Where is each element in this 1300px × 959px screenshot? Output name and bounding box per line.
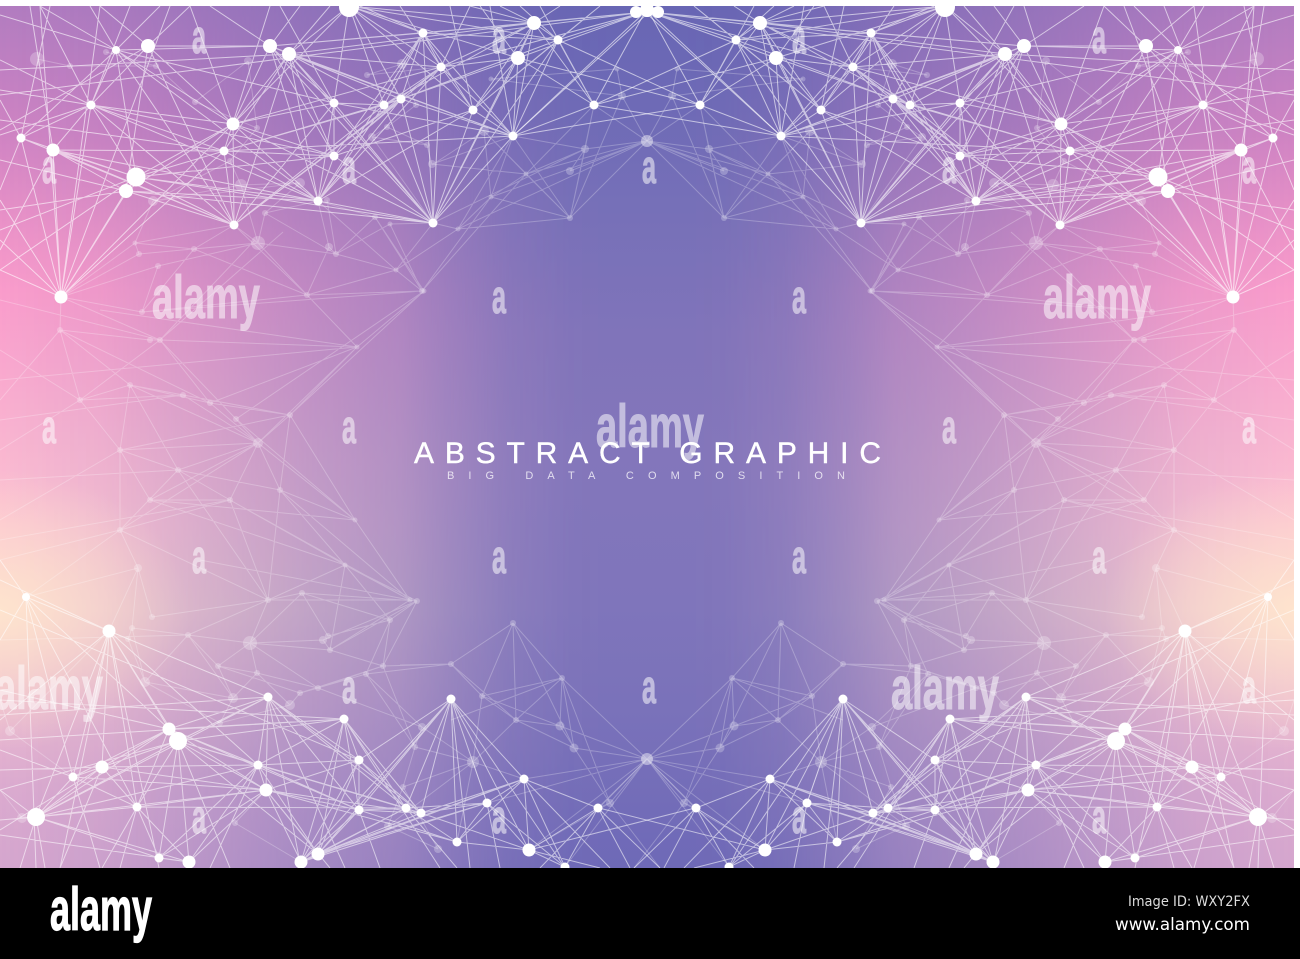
large watermark words: alamy	[891, 655, 999, 722]
small repeated watermark letters: a	[492, 790, 506, 843]
small repeated watermark letters: a	[42, 400, 56, 453]
subtitle: BIG DATA COMPOSITION	[447, 470, 845, 482]
small repeated watermark letters: a	[492, 530, 506, 583]
small repeated watermark letters: a	[1092, 10, 1106, 63]
small repeated watermark letters: a	[942, 400, 956, 453]
small repeated watermark letters: a	[942, 140, 956, 193]
large watermark words	[0, 264, 1151, 722]
small repeated watermark letters: a	[342, 140, 356, 193]
small repeated watermark letters: a	[1092, 530, 1106, 583]
small repeated watermark letters: a	[192, 10, 206, 63]
large watermark words: alamy	[1043, 264, 1151, 331]
large watermark words: alamy	[152, 264, 260, 331]
large watermark words: alamy	[596, 393, 704, 460]
small repeated watermark letters: a	[42, 140, 56, 193]
faint background lines	[0, 52, 700, 868]
website: www.alamy.com	[1115, 915, 1250, 935]
small repeated watermark letters: a	[342, 400, 356, 453]
small repeated watermark letters: a	[642, 660, 656, 713]
network: right half (mirror of left)	[513, 0, 1294, 872]
small repeated watermark letters: a	[492, 270, 506, 323]
footer bar	[0, 868, 1300, 959]
faint nodes	[5, 49, 653, 853]
network: left half	[0, 0, 781, 872]
small repeated watermark letters: a	[1242, 660, 1256, 713]
footer content	[50, 876, 1250, 944]
small repeated watermark letters: a	[642, 140, 656, 193]
bright nodes	[16, 0, 654, 872]
small repeated watermark letters: a	[1242, 140, 1256, 193]
small repeated watermark letters: a	[792, 530, 806, 583]
small repeated watermark letters: a	[1242, 400, 1256, 453]
small repeated watermark letters: a	[192, 530, 206, 583]
large watermark words: alamy	[0, 655, 103, 722]
small repeated watermark letters: a	[792, 790, 806, 843]
small repeated watermark letters: a	[192, 790, 206, 843]
small repeated watermark letters: a	[792, 10, 806, 63]
bottom bright lines	[0, 560, 695, 868]
title: ABSTRACT GRAPHIC	[414, 437, 881, 470]
small repeated watermark letters: a	[492, 10, 506, 63]
small repeated watermark letters: a	[1092, 790, 1106, 843]
alamy logo: alamy	[50, 876, 152, 943]
image id: Image ID: WXY2FX	[1128, 894, 1250, 910]
small repeated watermark letters: a	[792, 270, 806, 323]
small repeated watermark letters: a	[342, 660, 356, 713]
top bright lines	[0, 6, 781, 297]
